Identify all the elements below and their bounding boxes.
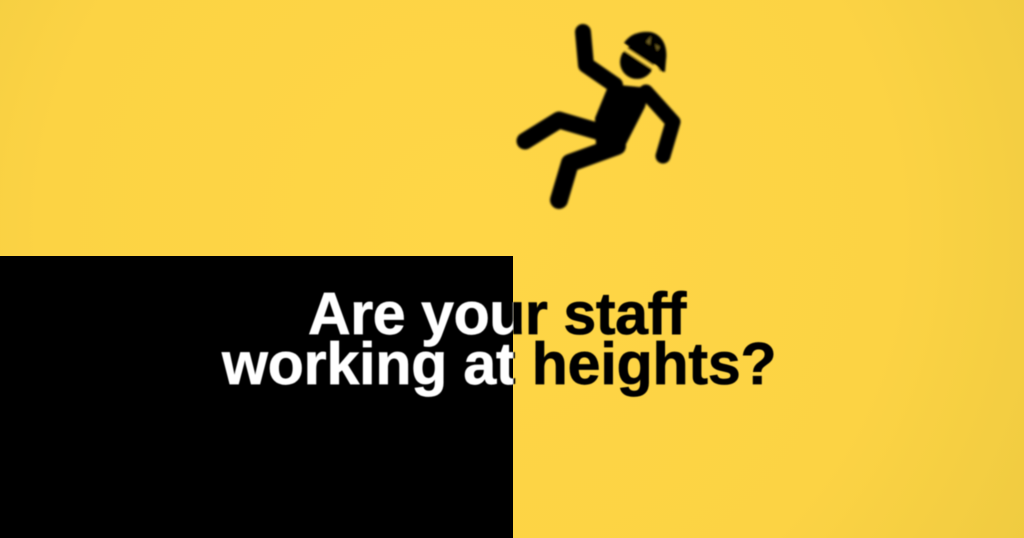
title xyxy=(221,281,776,397)
title: dark text layer: Are your staff xyxy=(308,281,687,347)
worker: head xyxy=(620,45,654,79)
title: white text layer over panel xyxy=(220,292,514,398)
worker: lower leg xyxy=(559,146,617,200)
worker: helmet brim gap xyxy=(622,47,660,72)
title: white text layer over panel: Are your staff xyxy=(308,281,687,347)
worker: helmet xyxy=(624,32,666,72)
title: white text layer over panel: working at heights? xyxy=(221,331,776,397)
title: dark text layer: working at heights? xyxy=(221,331,776,397)
worker: raised arm xyxy=(583,32,615,85)
title: dark text layer xyxy=(221,281,776,397)
worker: lower arm xyxy=(646,92,673,156)
worker: helmet highlights xyxy=(646,36,660,51)
icon: falling worker with hard hat xyxy=(525,32,673,200)
worker: upper leg xyxy=(525,120,600,141)
worker: torso xyxy=(595,84,650,150)
black panel xyxy=(0,256,513,538)
